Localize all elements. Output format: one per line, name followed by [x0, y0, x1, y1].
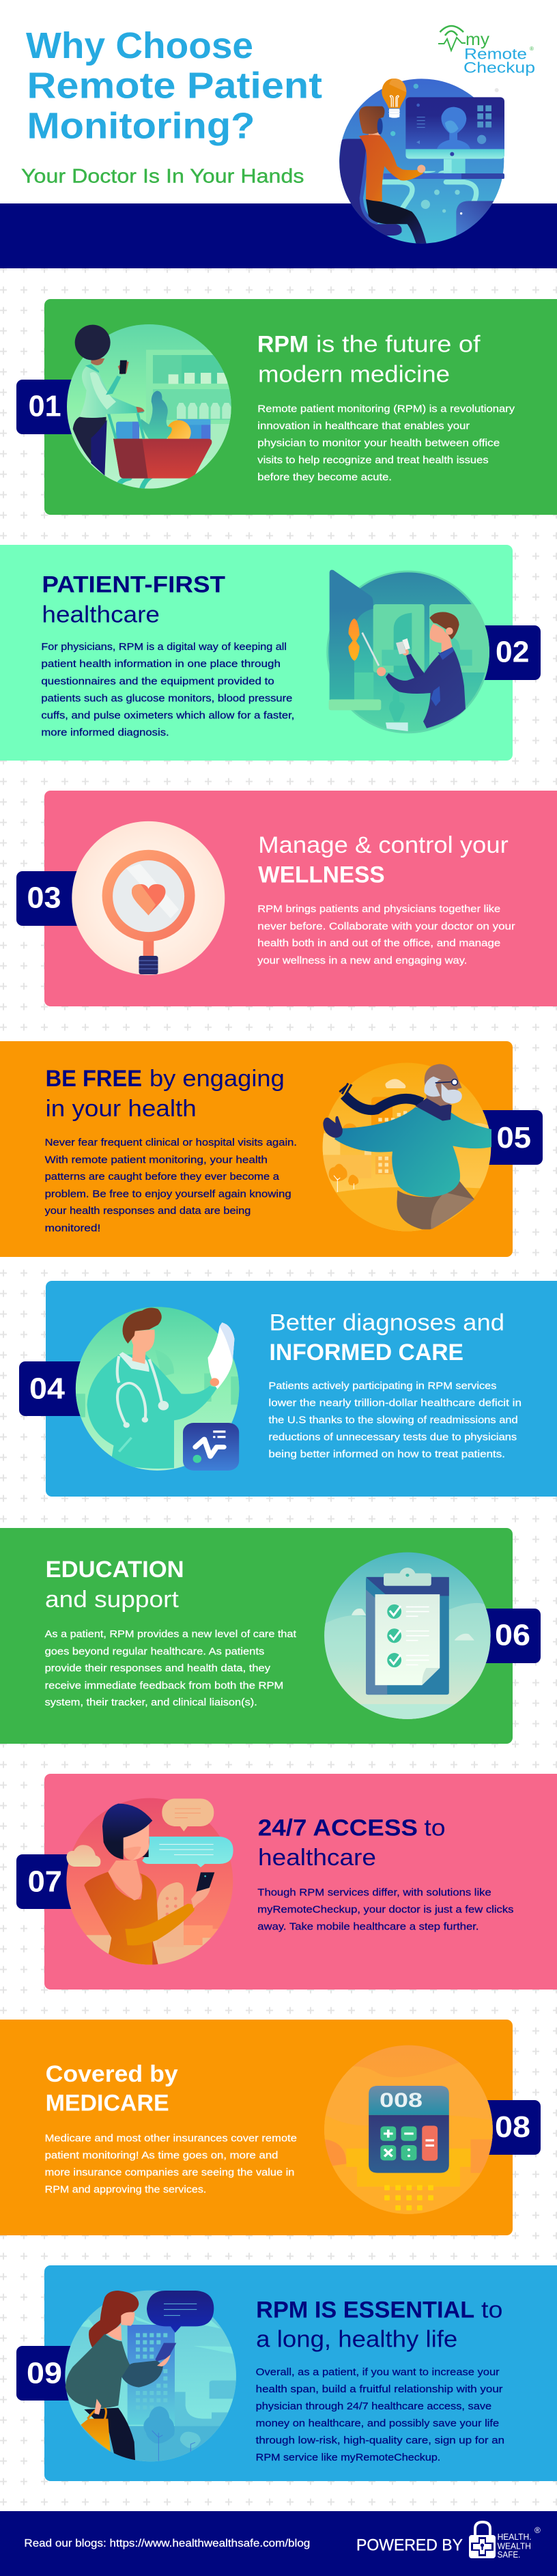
- card background: [44, 1774, 557, 1990]
- body text: patients such as glucose monitors, blood pressure: [41, 692, 292, 704]
- card background: [0, 1528, 513, 1744]
- heading: [256, 2297, 502, 2353]
- body text: health both in and out of the office, and manage: [257, 937, 500, 949]
- body text: patient monitoring! As time goes on, more and: [45, 2149, 278, 2161]
- body text: before they become acute.: [257, 471, 392, 483]
- heading: WELLNESS: [258, 862, 385, 888]
- panel: 05 be free: [0, 1041, 543, 1257]
- heading: RPM: [257, 332, 309, 358]
- title: [26, 25, 322, 146]
- body text: Medicare and most other insurances cover remote: [45, 2132, 297, 2144]
- card background: [0, 1041, 513, 1257]
- heading: to: [481, 2297, 502, 2323]
- card background: [0, 2020, 513, 2235]
- heading: [269, 1310, 504, 1365]
- heading: [257, 332, 481, 388]
- heading: modern medicine: [258, 362, 450, 388]
- illustration: woman with bag and phone: [61, 2291, 244, 2463]
- brand name: HEALTH.: [498, 2532, 531, 2542]
- subtitle: Your Doctor Is In Your Hands: [21, 165, 304, 187]
- illustration: woman with phone and chat bubbles: [66, 1798, 233, 1965]
- number badge: 07: [28, 1865, 62, 1899]
- body text: lower the nearly trillion-dollar healthcare deficit in: [268, 1397, 522, 1409]
- heading: PATIENT-FIRST: [42, 572, 225, 598]
- body text: [45, 2132, 297, 2195]
- number badge: 06: [495, 1619, 530, 1652]
- heading: a long, healthy life: [256, 2327, 457, 2353]
- illustration: magnifier with heart: [72, 821, 225, 975]
- body text: RPM service like myRemoteCheckup.: [256, 2452, 440, 2463]
- body text: cuffs, and pulse oximeters which allow for a faster,: [41, 710, 294, 722]
- body text: monitored!: [45, 1222, 100, 1234]
- hero illustration: doctor at telehealth monitor: [339, 79, 504, 244]
- body text: [257, 404, 515, 483]
- heading: and support: [45, 1587, 179, 1613]
- heading: [258, 1815, 446, 1871]
- heading: EDUCATION: [46, 1557, 184, 1583]
- body text: more insurance companies are seeing the value in: [45, 2166, 294, 2178]
- heading: Manage & control your: [258, 832, 509, 858]
- body text: problem. Be free to enjoy yourself again knowing: [45, 1188, 291, 1200]
- body text: For physicians, RPM is a digital way of keeping all: [41, 641, 287, 653]
- bulb: [382, 79, 406, 108]
- body text: questionnaires and the equipment provided to: [41, 675, 274, 687]
- body text: Patients actively participating in RPM services: [268, 1381, 497, 1391]
- body text: RPM brings patients and physicians together like: [257, 903, 500, 915]
- plant: [389, 690, 405, 722]
- panel: 06 education and support: [0, 1528, 541, 1744]
- illustration: clipboard checklist: [324, 1553, 494, 1723]
- body text: [45, 1137, 297, 1234]
- number badge: 05: [497, 1121, 531, 1155]
- body text: physician to monitor your health between office: [257, 437, 500, 449]
- brand name: WEALTH: [498, 2540, 531, 2551]
- illustration: woman shopping with phone: [67, 324, 237, 490]
- number badge: 04: [29, 1372, 66, 1406]
- person: [369, 128, 380, 138]
- number badge: 08: [495, 2110, 530, 2144]
- heading: to: [424, 1815, 446, 1841]
- body text: goes beyond regular healthcare. As patients: [45, 1645, 264, 1657]
- number badge: [16, 871, 85, 926]
- illustration: calculator: [319, 2046, 498, 2219]
- card background: [46, 1281, 557, 1497]
- heading: Covered by: [46, 2061, 178, 2087]
- card background: [44, 299, 557, 515]
- heading: INFORMED CARE: [269, 1340, 463, 1365]
- body text: With remote patient monitoring, your health: [45, 1154, 268, 1165]
- number badge: 01: [29, 390, 61, 423]
- heading: healthcare: [42, 602, 160, 628]
- number badge: 09: [27, 2357, 62, 2390]
- footer band: [0, 2511, 557, 2576]
- body text: [257, 903, 515, 966]
- body text: the U.S thanks to the slowing of readmissions and: [268, 1415, 518, 1426]
- body text: [268, 1381, 522, 1460]
- number badge: [16, 2346, 79, 2401]
- panel: 04 better diagnoses: [19, 1281, 557, 1497]
- logo: myRemoteCheckup: Remote: [464, 46, 527, 63]
- body text: provide their responses and health data, they: [45, 1662, 271, 1674]
- title: Remote Patient: [27, 66, 322, 107]
- logo: myRemoteCheckup: [438, 26, 535, 76]
- man: [406, 654, 425, 681]
- body text: health span, build a fruitful relationship with your: [256, 2383, 502, 2395]
- body text: innovation in healthcare that enables your: [257, 421, 470, 431]
- body text: Remote patient monitoring (RPM) is a revolutionary: [257, 404, 515, 415]
- body text: more informed diagnosis.: [41, 726, 169, 739]
- heading: [46, 1066, 285, 1122]
- body text: [256, 2366, 504, 2463]
- panel: 02 patient-first healthcare: [0, 545, 541, 761]
- powered by: POWERED BY: [356, 2536, 463, 2554]
- desk: [384, 173, 504, 179]
- illustration: happy older man with scarf: [322, 1063, 500, 1236]
- heading: MEDICARE: [46, 2091, 169, 2117]
- header band: [0, 203, 557, 268]
- logo: padlock with cross: [469, 2522, 496, 2558]
- brand name: [498, 2532, 531, 2560]
- body text: physician through 24/7 healthcare access, save: [256, 2401, 491, 2412]
- body text: myRemoteCheckup, your doctor is just a few clicks: [257, 1903, 513, 1915]
- body text: [41, 641, 294, 739]
- panel: 03 manage and control wellness: [16, 791, 557, 1006]
- panel: 09 RPM is essential: [16, 2265, 557, 2481]
- body text: being better informed on how to treat patients.: [268, 1449, 505, 1460]
- number badge: 03: [27, 881, 61, 915]
- body text: receive immediate feedback from both the RPM: [45, 1680, 283, 1691]
- body text: through low-risk, high-quality care, sign up for an: [256, 2435, 504, 2446]
- heading: 24/7 ACCESS: [258, 1815, 418, 1841]
- title: Why Choose: [26, 25, 253, 66]
- heading: RPM IS ESSENTIAL: [256, 2297, 474, 2323]
- number badge: [478, 2100, 541, 2155]
- body text: system, their tracker, and clinical liaison(s).: [45, 1697, 257, 1708]
- logo: myRemoteCheckup: ®: [530, 46, 534, 52]
- panel: 07 24/7 access: [16, 1774, 557, 1990]
- brand name: SAFE.: [498, 2549, 520, 2560]
- heading: Better diagnoses and: [269, 1310, 504, 1336]
- body text: Never fear frequent clinical or hospital visits again.: [45, 1137, 297, 1148]
- title: Monitoring?: [27, 105, 255, 146]
- body text: [45, 1628, 297, 1708]
- heading: healthcare: [258, 1845, 376, 1871]
- body text: your wellness in a new and engaging way.: [257, 954, 467, 966]
- logo: myRemoteCheckup: my: [466, 30, 490, 49]
- number badge: [16, 1854, 79, 1909]
- body text: never before. Collaborate with your doctor on your: [257, 920, 515, 932]
- heading: [46, 2061, 178, 2117]
- number badge: [16, 380, 79, 434]
- body text: RPM and approving the services.: [45, 2183, 206, 2195]
- number badge: [478, 1609, 541, 1663]
- blog link: Read our blogs: https://www.healthwealthsafe.com/blog: [24, 2538, 310, 2549]
- heading: in your health: [46, 1096, 197, 1122]
- number badge: 02: [496, 636, 529, 669]
- body text: your health responses and data are being: [45, 1205, 251, 1217]
- body text: As a patient, RPM provides a new level of care that: [45, 1628, 297, 1640]
- heading: is the future of: [316, 332, 481, 358]
- heading: [258, 832, 509, 888]
- panel: 01 RPM is the future: [16, 299, 557, 515]
- body text: money on healthcare, and possibly save your life: [256, 2418, 499, 2429]
- body text: reductions of unnecessary tests due to physicians: [268, 1431, 517, 1443]
- illustration: doctor with pointer: [326, 570, 493, 733]
- body text: [257, 1886, 513, 1932]
- heading: BE FREE: [46, 1066, 142, 1092]
- heading: [45, 1557, 184, 1613]
- registered mark: ®: [534, 2525, 541, 2535]
- logo: myRemoteCheckup: Checkup: [463, 59, 535, 76]
- calculator display: 008: [380, 2089, 423, 2112]
- monitor: [405, 97, 504, 159]
- body text: patterns are caught before they ever become a: [45, 1171, 280, 1183]
- body text: away. Take mobile healthcare a step further.: [257, 1921, 479, 1932]
- body text: Overall, as a patient, if you want to increase your: [256, 2366, 500, 2378]
- card background: [44, 2265, 557, 2481]
- body text: visits to help recognize and treat health issues: [257, 454, 489, 466]
- number badge: [19, 1361, 87, 1416]
- heading: by engaging: [149, 1066, 285, 1092]
- panel: 08 covered by medicare: [0, 2020, 541, 2235]
- illustration: doctor with stethoscope: [76, 1307, 242, 1471]
- heading: [42, 572, 225, 628]
- number badge: [478, 1110, 543, 1165]
- body text: Though RPM services differ, with solutions like: [257, 1886, 491, 1898]
- card background: [44, 791, 557, 1006]
- card background: [0, 545, 513, 761]
- body text: patient health information in one place through: [41, 658, 281, 670]
- number badge: [478, 625, 541, 680]
